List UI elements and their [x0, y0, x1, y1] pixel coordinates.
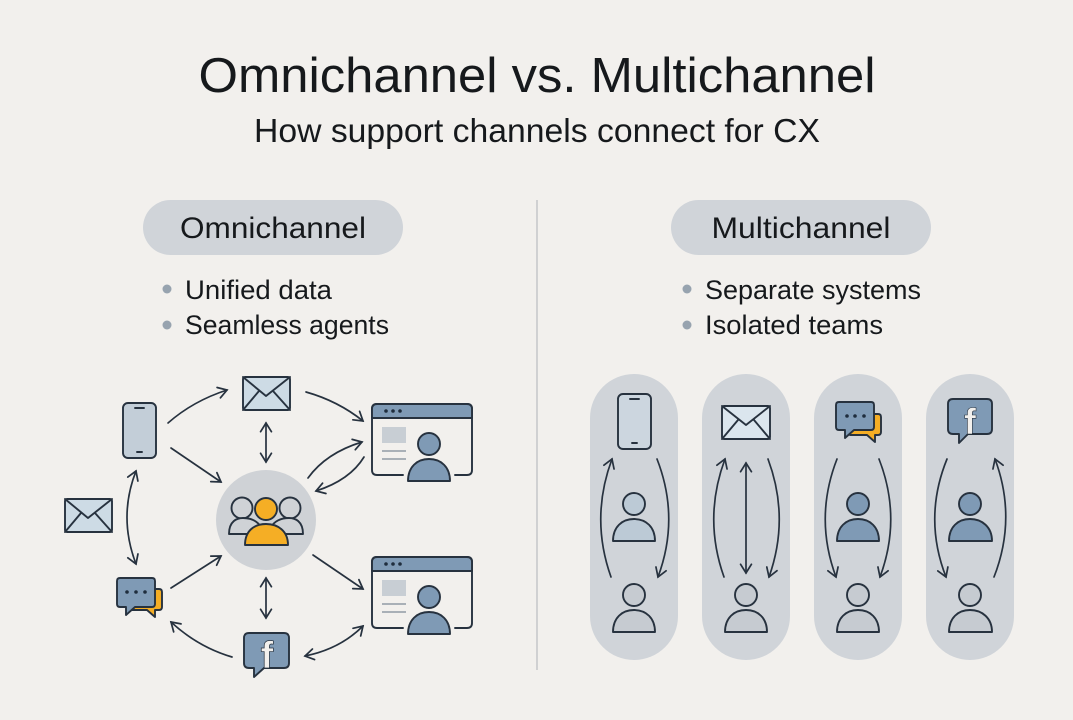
- heading pill: Omnichannel: Omnichannel: [180, 212, 366, 245]
- bullet list: multichannel traits: [682, 275, 921, 340]
- heading pill: Multichannel: Multichannel: [712, 212, 890, 245]
- column: chat silo: [814, 374, 902, 660]
- icon: agent browser bottom: [372, 557, 472, 634]
- bullet list: omnichannel traits: Unified data: [185, 275, 333, 305]
- arrows: hub connections: [127, 390, 364, 657]
- column: facebook silo: [926, 374, 1014, 660]
- bullet list: multichannel traits: Isolated teams: [705, 310, 883, 340]
- subtitle: How support channels connect for CX: [254, 112, 820, 149]
- icon: agents hub: [216, 470, 316, 570]
- center divider: [536, 200, 538, 670]
- column: phone silo: [590, 374, 678, 660]
- icon: email left: [65, 499, 112, 532]
- column: email silo: [702, 374, 790, 660]
- icon: facebook message: f: [261, 635, 274, 677]
- panel: omnichannel: [65, 200, 472, 677]
- hub and spoke diagram: [65, 377, 472, 677]
- bullet list: omnichannel traits: Seamless agents: [185, 310, 389, 340]
- icon: email top: [243, 377, 290, 410]
- title: Omnichannel vs. Multichannel: [198, 49, 876, 103]
- icon: agent browser top: [372, 404, 472, 481]
- bullet list: omnichannel traits: [162, 275, 389, 340]
- heading pill: Omnichannel: [143, 200, 403, 255]
- panel: multichannel: [590, 200, 1014, 660]
- icon: phone: [123, 403, 156, 458]
- heading pill: Multichannel: [671, 200, 931, 255]
- bullet list: multichannel traits: Separate systems: [705, 275, 921, 305]
- icon: facebook message: [244, 633, 289, 677]
- icon: chat bubbles: [117, 578, 162, 617]
- column: facebook silo: f: [964, 401, 977, 442]
